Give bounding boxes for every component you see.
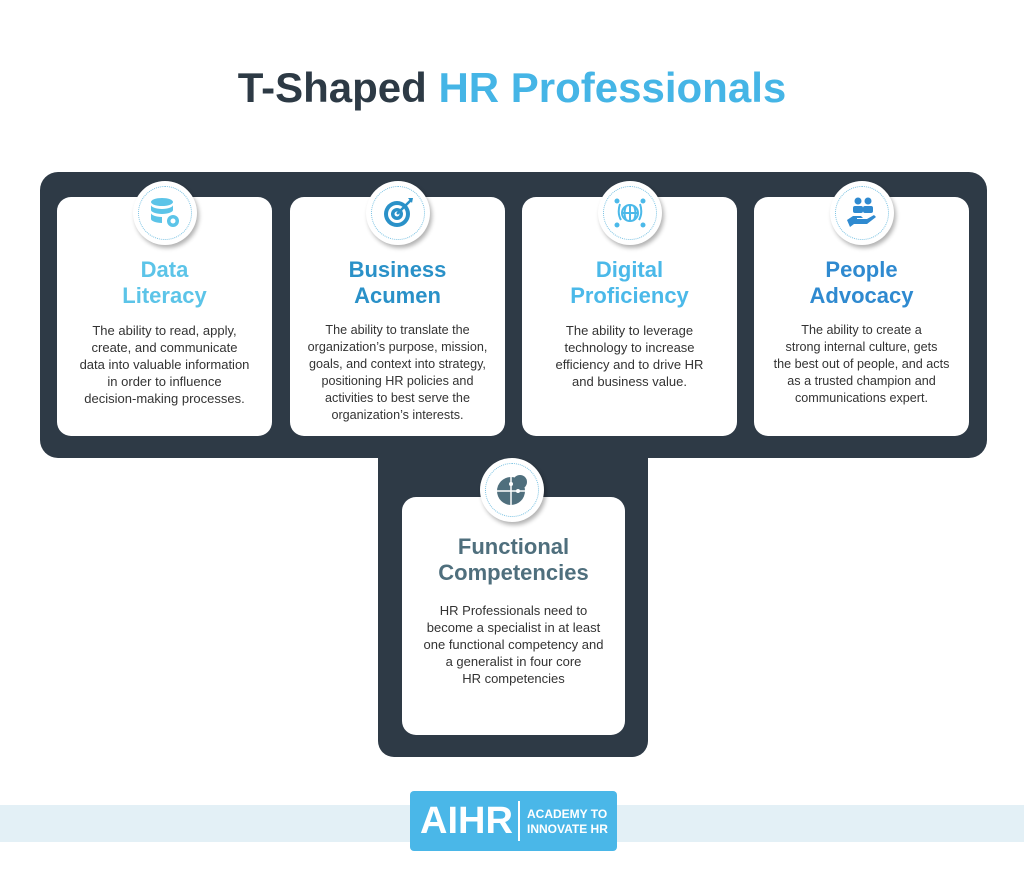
panel: business acumen: The ability to translate the — [325, 323, 470, 337]
panel: people advocacy: strong internal culture, gets — [786, 340, 937, 354]
panel: digital proficiency: Digital — [596, 257, 663, 282]
panel: data literacy: create, and communicate — [92, 340, 237, 355]
panel: digital proficiency: and business value. — [572, 374, 687, 389]
panel: functional competencies: HR competencies — [462, 671, 565, 686]
icon: puzzle — [480, 458, 544, 522]
panel: people advocacy: the best out of people, and acts — [774, 357, 949, 371]
panel: digital proficiency: The ability to leverage — [566, 323, 693, 338]
footer band — [0, 805, 1024, 842]
panel: business acumen: organization’s interests. — [331, 408, 464, 422]
panel: functional competencies: a generalist in four core — [446, 654, 581, 669]
panel: business acumen: goals, and context into strategy, — [309, 357, 486, 371]
icon: database gear — [133, 181, 197, 245]
title: T-Shaped HR Professionals — [238, 64, 786, 111]
icon: target — [366, 181, 430, 245]
panel: data literacy: The ability to read, apply, — [92, 323, 237, 338]
panel: people advocacy: People — [825, 257, 898, 282]
logo — [410, 791, 617, 851]
panel: digital proficiency: technology to increase — [564, 340, 695, 355]
logo: AIHR — [420, 800, 513, 842]
icon: globe network — [598, 181, 662, 245]
panel: business acumen: Business — [349, 257, 446, 282]
T-shape background — [40, 172, 987, 458]
panel: business acumen: activities to best serve the — [325, 391, 470, 405]
panel: data literacy: in order to influence — [107, 374, 222, 389]
panel: data literacy: Literacy — [122, 283, 207, 308]
panel: business acumen: Acumen — [354, 283, 441, 308]
panel: digital proficiency — [522, 197, 737, 436]
panel: data literacy — [57, 197, 272, 436]
panel: digital proficiency: efficiency and to drive HR — [556, 357, 703, 372]
panel: functional competencies — [402, 497, 625, 735]
panel: digital proficiency: Proficiency — [570, 283, 689, 308]
panel: data literacy: decision-making processes. — [84, 391, 245, 406]
panel: functional competencies: HR Professionals need to — [440, 603, 587, 618]
panel: functional competencies: Competencies — [438, 560, 589, 585]
panel: data literacy: Data — [141, 257, 188, 282]
panel: people advocacy — [754, 197, 969, 436]
panel: people advocacy: The ability to create a — [801, 323, 922, 337]
panel: functional competencies: become a specialist in at least — [427, 620, 600, 635]
panel: business acumen: positioning HR policies and — [322, 374, 473, 388]
panel: business acumen — [290, 197, 505, 436]
panel: people advocacy: communications expert. — [795, 391, 928, 405]
panel: people advocacy: Advocacy — [810, 283, 913, 308]
panel: functional competencies: one functional competency and — [424, 637, 603, 652]
panel: data literacy: data into valuable information — [80, 357, 249, 372]
panel: functional competencies: Functional — [458, 534, 569, 559]
icon: hand with people — [830, 181, 894, 245]
logo: INNOVATE HR — [527, 822, 608, 836]
panel: business acumen: organization’s purpose, mission, — [308, 340, 487, 354]
panel: people advocacy: as a trusted champion and — [787, 374, 936, 388]
logo: ACADEMY TO — [527, 807, 607, 821]
